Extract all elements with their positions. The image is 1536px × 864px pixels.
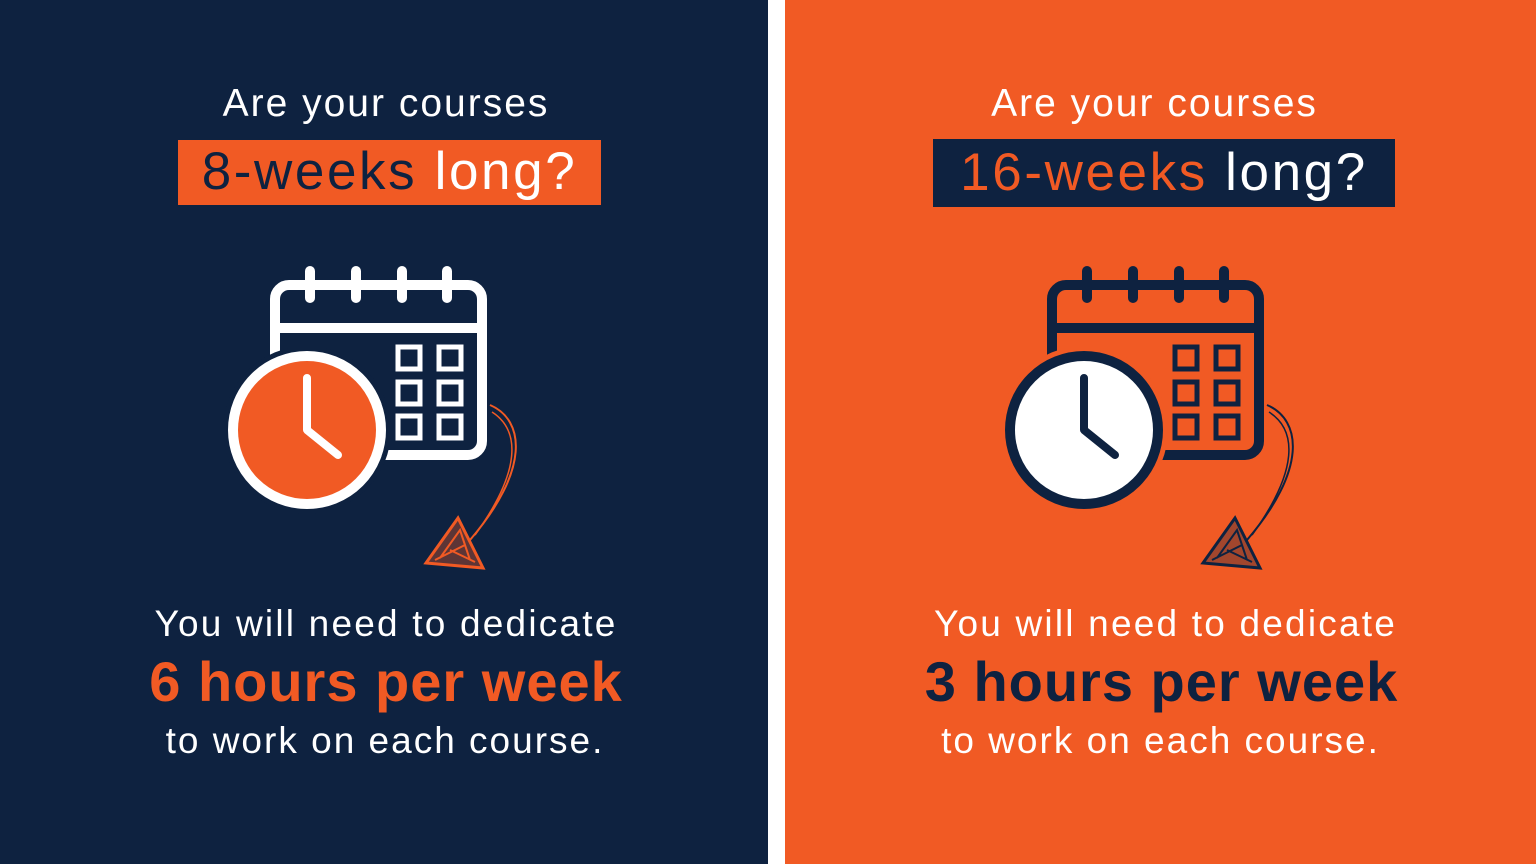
icon: calendar with clock and arrow	[1005, 266, 1294, 570]
text: 3 hours per week: 3 hours per week	[925, 650, 1398, 713]
text: dedicate line: You will need to dedicate	[154, 603, 618, 644]
heading: question: Are your courses	[223, 82, 549, 125]
highlight box: 16-weeks long: 16-weeks long?	[960, 143, 1368, 202]
highlight box: 8-weeks long: 8-weeks long?	[202, 142, 577, 201]
panel: 8-week courses	[0, 0, 768, 864]
text: each course: to work on each course.	[941, 720, 1380, 761]
icon: calendar with clock and arrow	[228, 266, 517, 570]
panel: 16-week courses	[785, 0, 1536, 864]
heading: question: Are your courses	[991, 82, 1318, 125]
text: 6 hours per week: 6 hours per week	[149, 650, 623, 713]
text: each course: to work on each course.	[166, 720, 604, 761]
text: dedicate line: You will need to dedicate	[934, 603, 1397, 644]
